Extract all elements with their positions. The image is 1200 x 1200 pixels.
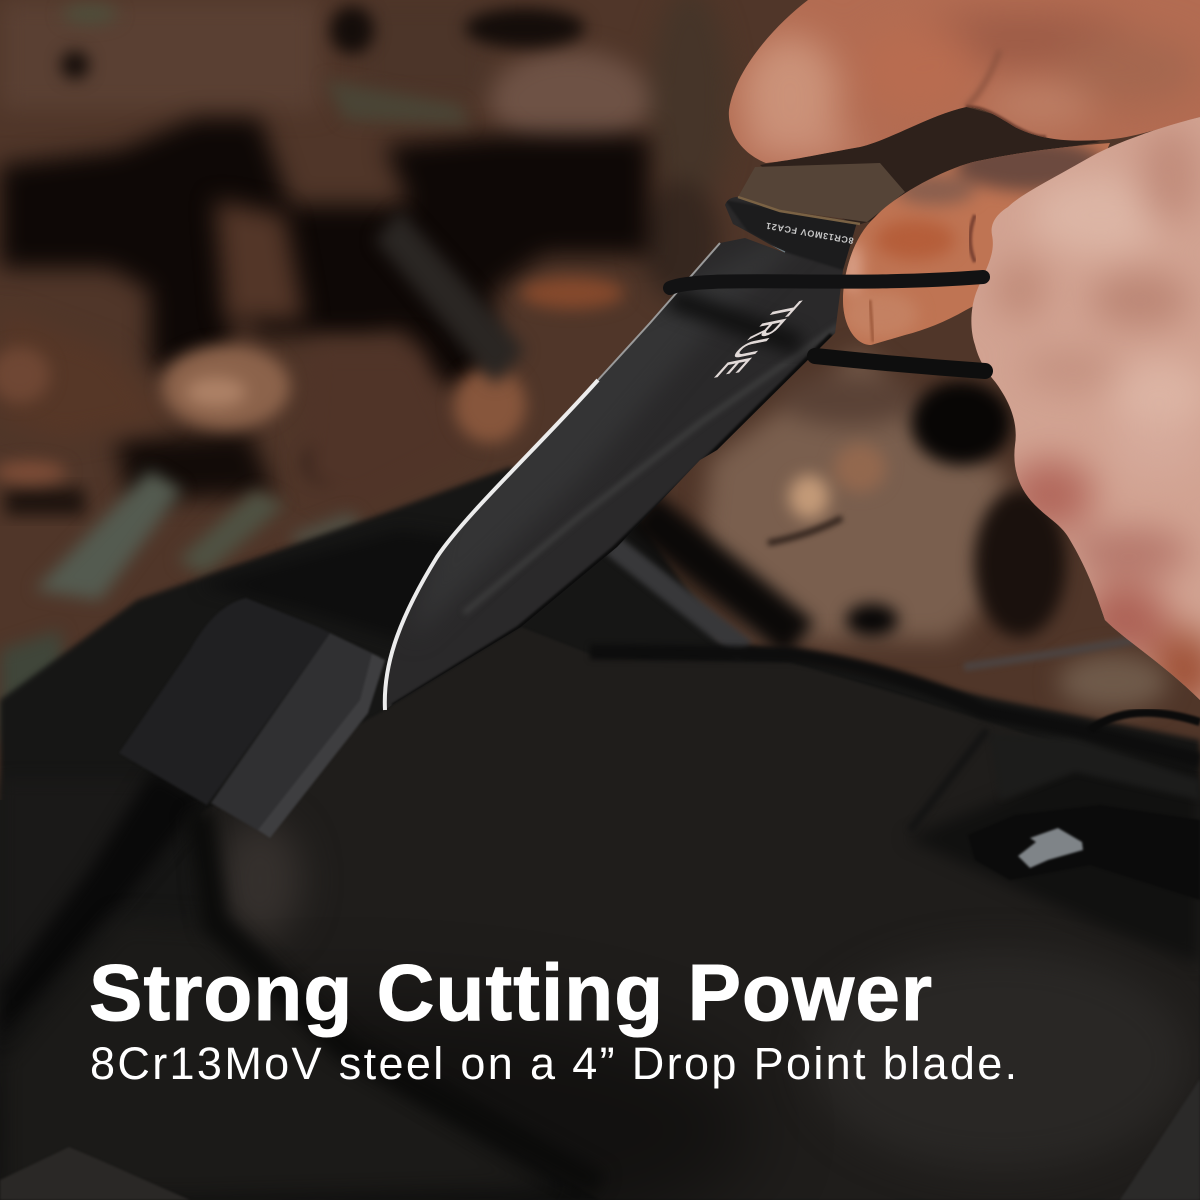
right hand gripping the cord — [960, 100, 1200, 710]
grey drawcord and loop — [964, 640, 1136, 667]
soft shade over the lower left of the pack — [0, 1000, 760, 1200]
twig and muted green leaves — [0, 4, 525, 745]
flat grind, lighter upper plane — [432, 262, 758, 599]
bright sharpened edge — [385, 380, 598, 710]
knife handle — [738, 107, 1100, 225]
cord shadow on blade — [670, 298, 800, 345]
subheading: 8Cr13MoV steel on a 4” Drop Point blade. — [90, 1038, 1019, 1089]
connected dark shadow mass — [0, 118, 650, 385]
blurred forest floor background — [0, 0, 1200, 800]
bottom left folds — [0, 780, 195, 1040]
ricasso dark band — [727, 200, 856, 270]
webbing strap — [119, 598, 385, 838]
upper panel and pocket — [906, 745, 1200, 965]
side straps behind the blade — [640, 510, 800, 640]
main fabric panel — [200, 627, 1200, 1200]
dark piping along top of pack — [590, 652, 1200, 760]
backpack body — [0, 467, 1200, 1200]
heading: Strong Cutting Power — [89, 948, 933, 1037]
middle finger — [840, 139, 1120, 350]
upper hand thumb and fingers — [700, 0, 1200, 170]
blade logo: TRUE — [706, 299, 810, 380]
bevel streak — [464, 325, 840, 613]
engraved steel mark: 8CR13MOV FCA21 — [765, 221, 854, 246]
embroidered logo tag — [968, 805, 1200, 900]
paracord being cut — [670, 277, 985, 371]
knife blade — [380, 190, 870, 720]
brown leaf shapes over the shadow — [0, 200, 470, 510]
caption text block — [89, 948, 1019, 1089]
notch glint — [771, 245, 786, 252]
dark lower band — [395, 338, 835, 710]
tan ground to the right of the blade — [626, 350, 1168, 710]
webbing at lower right — [1120, 1079, 1200, 1200]
upper brown leaf layer — [0, 0, 730, 300]
upper rear pack shape — [0, 467, 1200, 1200]
